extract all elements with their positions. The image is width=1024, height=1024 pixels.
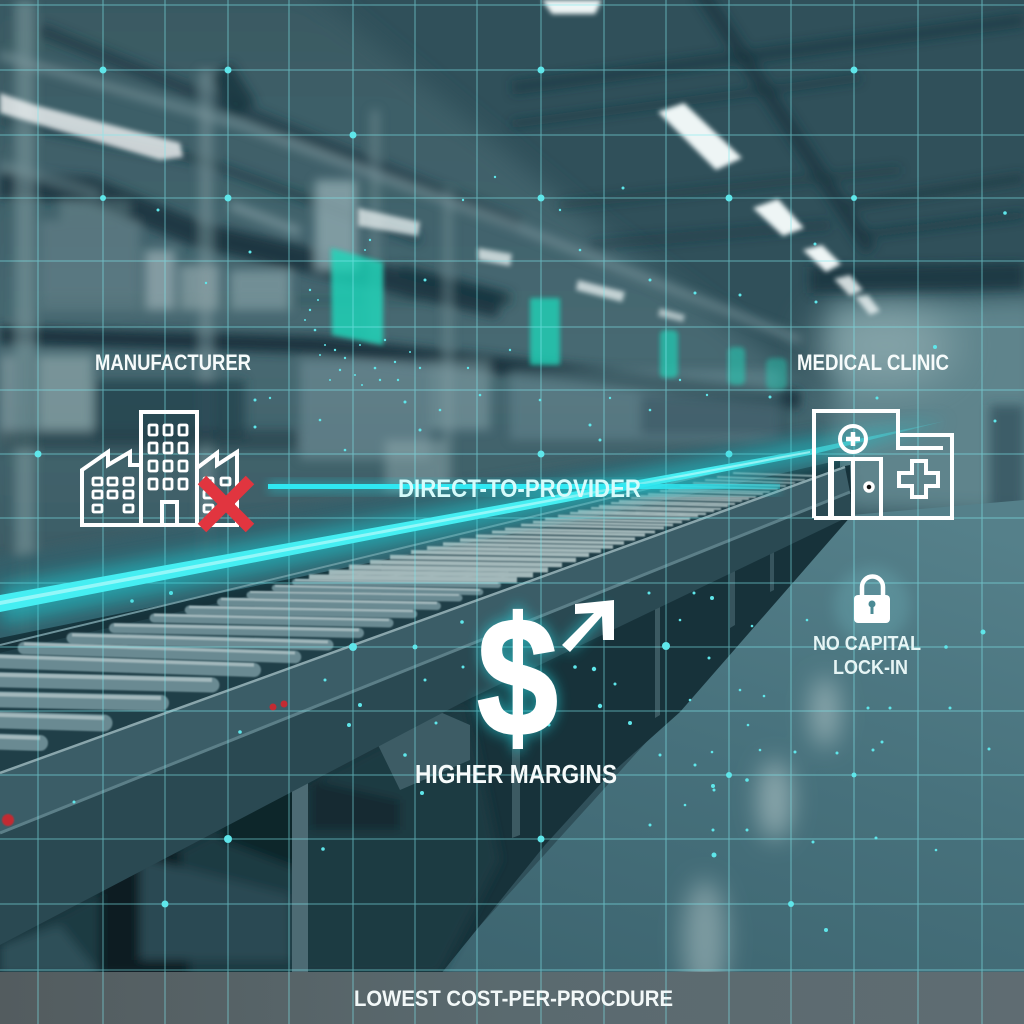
roller highlights xyxy=(0,580,498,738)
icon: medical clinic building xyxy=(814,411,952,518)
teal data beam xyxy=(0,420,950,625)
label: direct-to-provider: DIRECT-TO-PROVIDER xyxy=(398,475,641,503)
icon: dollar sign with rising arrow: $ xyxy=(477,584,558,771)
label: medical clinic: MEDICAL CLINIC xyxy=(797,350,949,375)
label: no capital lock-in xyxy=(813,633,921,679)
icon: dollar sign with rising arrow xyxy=(477,584,614,771)
icon: manufacturer buildings with red cross xyxy=(82,412,250,528)
conveyor top: bed, rollers and rails xyxy=(0,452,852,945)
footer bar xyxy=(0,972,1024,1024)
icon: dollar sign with rising arrow: $ xyxy=(477,584,558,771)
footer label: lowest cost-per-procdure: LOWEST COST-PER-PROCDURE xyxy=(354,986,673,1011)
under-conveyor structure xyxy=(0,465,852,975)
icon: padlock xyxy=(834,567,910,643)
red cross xyxy=(202,480,250,528)
label: higher margins: HIGHER MARGINS xyxy=(415,759,617,789)
label: no capital lock-in: LOCK-IN xyxy=(833,657,908,679)
label: manufacturer: MANUFACTURER xyxy=(95,350,251,375)
label: no capital lock-in: NO CAPITAL xyxy=(813,633,921,655)
direct-to-provider link line xyxy=(268,480,780,494)
